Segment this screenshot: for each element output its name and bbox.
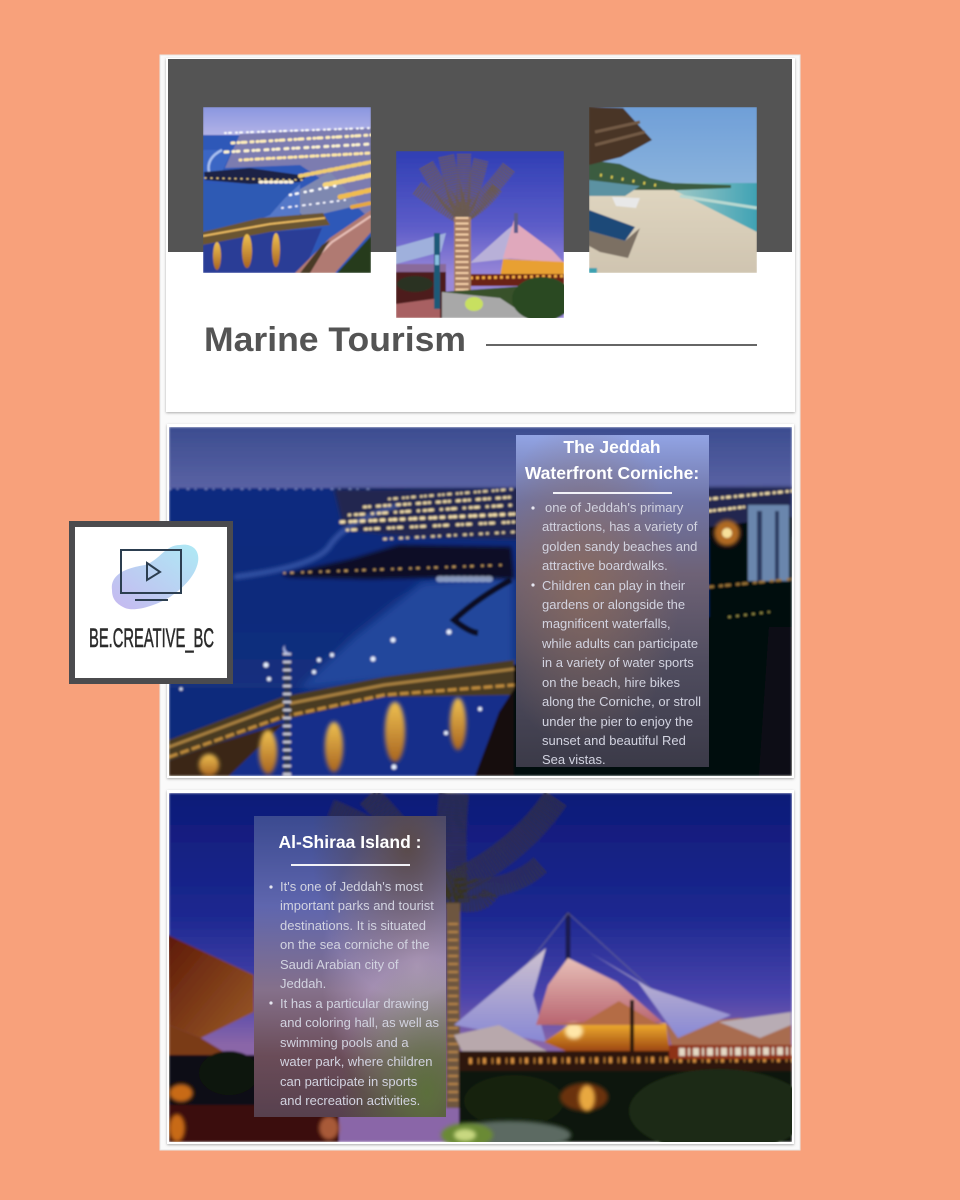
island bullet list: Jeddah. [280, 976, 326, 991]
island bullet list: important parks and tourist [280, 898, 434, 913]
watermark badge: BE.CREATIVE_BC [72, 524, 230, 681]
corniche bullet list: on the beach, hire bikes [542, 675, 681, 690]
text panel: corniche [516, 435, 709, 767]
island bullet list [269, 879, 439, 1108]
photo: city at dusk [169, 427, 792, 776]
corniche heading [525, 437, 699, 483]
outer white card [160, 55, 800, 1150]
corniche bullet list [531, 500, 701, 767]
corniche bullet list: Sea vistas. [542, 752, 606, 767]
corniche bullet list: gardens or alongside the [542, 597, 685, 612]
corniche heading: The Jeddah [563, 437, 661, 457]
corniche heading: Waterfront Corniche: [525, 463, 699, 483]
photo: tent at dusk [168, 793, 809, 1153]
island bullet list: and recreation activities. [280, 1093, 420, 1108]
photo: city coastline [203, 107, 371, 273]
island bullet list: swimming pools and a [280, 1035, 409, 1050]
island bullet list: Saudi Arabian city of [280, 957, 399, 972]
island bullet list: can participate in sports [280, 1074, 418, 1089]
island bullet list: and coloring hall, as well as [280, 1015, 439, 1030]
panel: Jeddah Waterfront Corniche slide [167, 424, 794, 778]
photo: beach [589, 107, 757, 273]
panel: Al-Shiraa Island slide [167, 790, 809, 1153]
corniche bullet list: attractive boardwalks. [542, 558, 668, 573]
panel: title slide [166, 58, 795, 412]
island bullet list: It's one of Jeddah's most [280, 879, 423, 894]
heading: Marine Tourism: Marine Tourism [204, 321, 466, 359]
brand name: BE.CREATIVE_BC [89, 623, 214, 653]
photo: palm and tent [396, 151, 572, 321]
corniche bullet list: in a variety of water sports [542, 655, 694, 670]
corniche bullet list: along the Corniche, or stroll [542, 694, 701, 709]
corniche bullet list: under the pier to enjoy the [542, 714, 693, 729]
corniche bullet list: sunset and beautiful Red [542, 733, 686, 748]
grey header band [168, 59, 792, 252]
corniche bullet list: golden sandy beaches and [542, 539, 697, 554]
island bullet list: water park, where children [279, 1054, 432, 1069]
corniche bullet list: while adults can participate [541, 636, 698, 651]
text panel: island [254, 816, 446, 1117]
island heading: Al-Shiraa Island : [279, 832, 421, 852]
corniche bullet list: Children can play in their [542, 578, 686, 593]
corniche bullet list: one of Jeddah's primary [545, 500, 684, 515]
island bullet list: on the sea corniche of the [280, 937, 430, 952]
island bullet list: It has a particular drawing [280, 996, 429, 1011]
icon: video monitor on blob [112, 545, 198, 609]
corniche bullet list: attractions, has a variety of [542, 519, 698, 534]
island bullet list: destinations. It is situated [280, 918, 426, 933]
corniche bullet list: magnificent waterfalls, [542, 616, 671, 631]
title rule [486, 344, 757, 346]
